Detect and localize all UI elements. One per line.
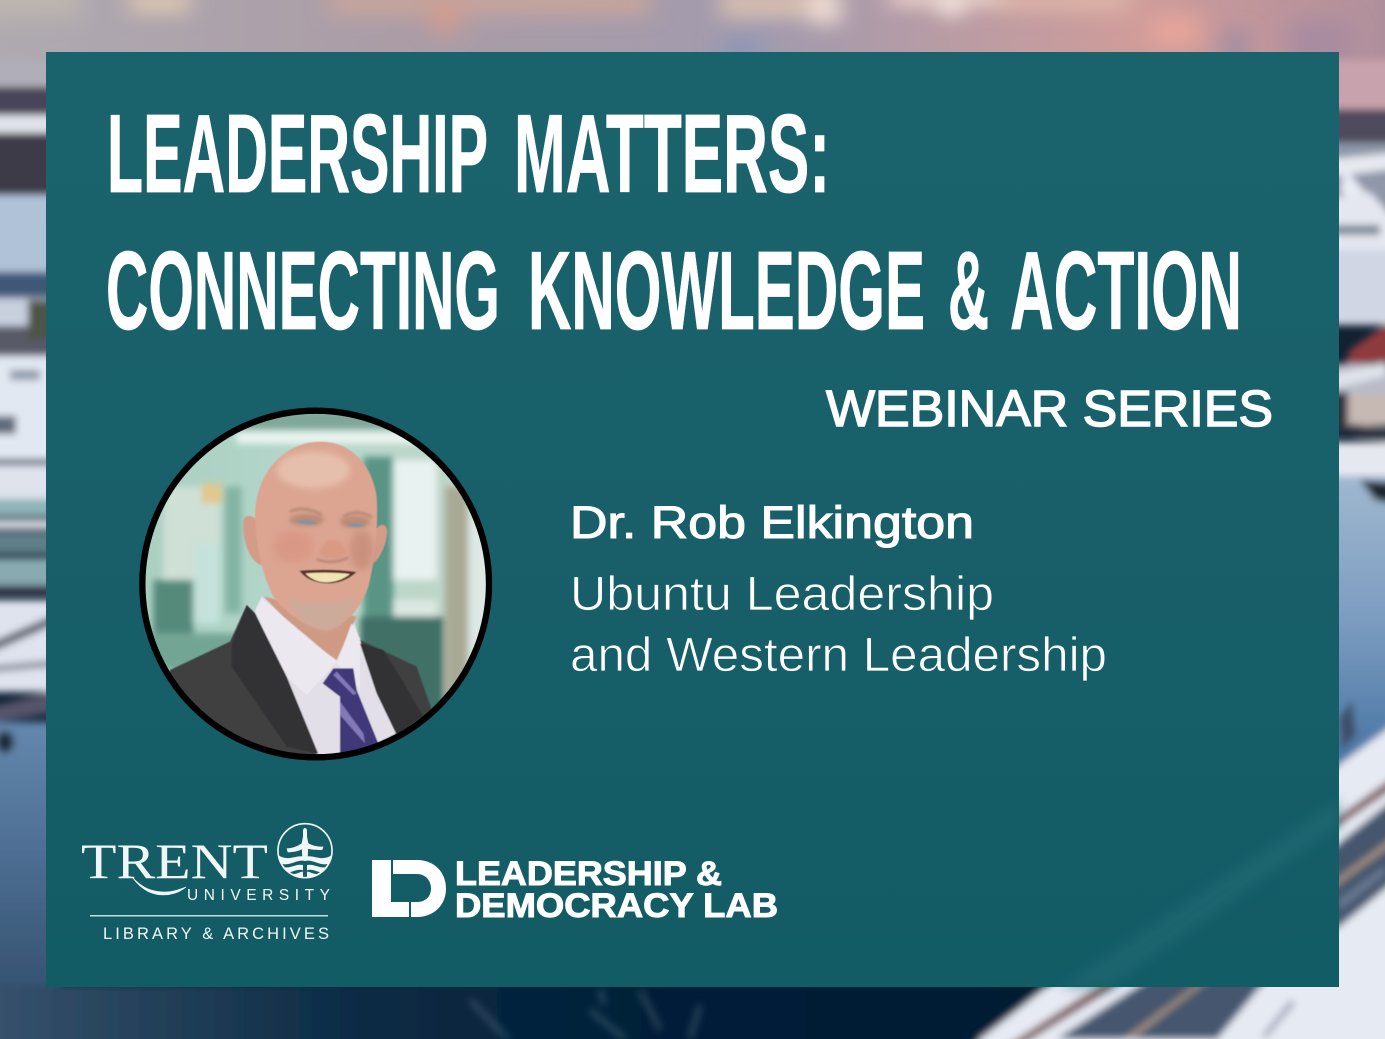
icon: Trent shield bbox=[278, 824, 332, 878]
beard stubble bbox=[289, 599, 354, 630]
right column scenery bbox=[1320, 60, 1385, 766]
wordmark line 2: DEMOCRACY LAB bbox=[455, 887, 778, 925]
wordmark line 1: LEADERSHIP & bbox=[455, 855, 722, 893]
title line 2 bbox=[106, 229, 1242, 353]
necktie bbox=[323, 668, 378, 758]
speaker name: Dr. Rob Elkington bbox=[570, 497, 974, 548]
shirt bbox=[255, 597, 397, 757]
title line 1: LEADERSHIP bbox=[107, 92, 488, 216]
collar bbox=[255, 598, 360, 695]
jacket lapels bbox=[232, 605, 423, 754]
speaker text bbox=[570, 497, 1107, 682]
speaker portrait bbox=[140, 410, 493, 763]
head bbox=[255, 442, 377, 630]
text LIBRARY & ARCHIVES: LIBRARY & ARCHIVES bbox=[103, 925, 329, 943]
bottom dark water bbox=[0, 985, 1220, 1039]
cheek shading bbox=[276, 532, 312, 561]
black ring bbox=[142, 411, 489, 757]
R swash bbox=[132, 877, 186, 895]
ears bbox=[243, 516, 387, 565]
talk title line 1: Ubuntu Leadership bbox=[570, 568, 994, 621]
sky band bbox=[0, 0, 1385, 140]
brows bbox=[290, 509, 372, 517]
bottom water specks bbox=[470, 990, 700, 1039]
talk title line 2: and Western Leadership bbox=[570, 629, 1107, 682]
text UNIVERSITY: UNIVERSITY bbox=[187, 887, 330, 904]
photo bbox=[140, 410, 493, 763]
left shoreline and snow bbox=[0, 60, 60, 1002]
person bbox=[163, 442, 432, 760]
neck bbox=[263, 597, 357, 660]
scalp highlight bbox=[277, 452, 350, 488]
suit jacket bbox=[163, 605, 432, 760]
icon: LD monogram bbox=[372, 860, 446, 917]
logo: Trent University Library & Archives bbox=[81, 824, 332, 943]
subtitle: webinar series: WEBINAR SERIES bbox=[826, 380, 1273, 437]
eyes bbox=[296, 520, 365, 527]
eye sockets bbox=[289, 514, 324, 526]
title line 2: CONNECTING bbox=[106, 229, 500, 353]
smile bbox=[299, 570, 357, 583]
right snow and road bbox=[960, 705, 1385, 1039]
title line 1: MATTERS: bbox=[514, 92, 830, 216]
logo: Leadership & Democracy Lab bbox=[372, 855, 778, 925]
nose bbox=[320, 540, 345, 558]
title line 2: KNOWLEDGE bbox=[528, 229, 925, 353]
divider rule bbox=[90, 915, 328, 916]
title line 2: & bbox=[948, 229, 989, 353]
wordmark TRENT: TRENT bbox=[81, 833, 268, 889]
